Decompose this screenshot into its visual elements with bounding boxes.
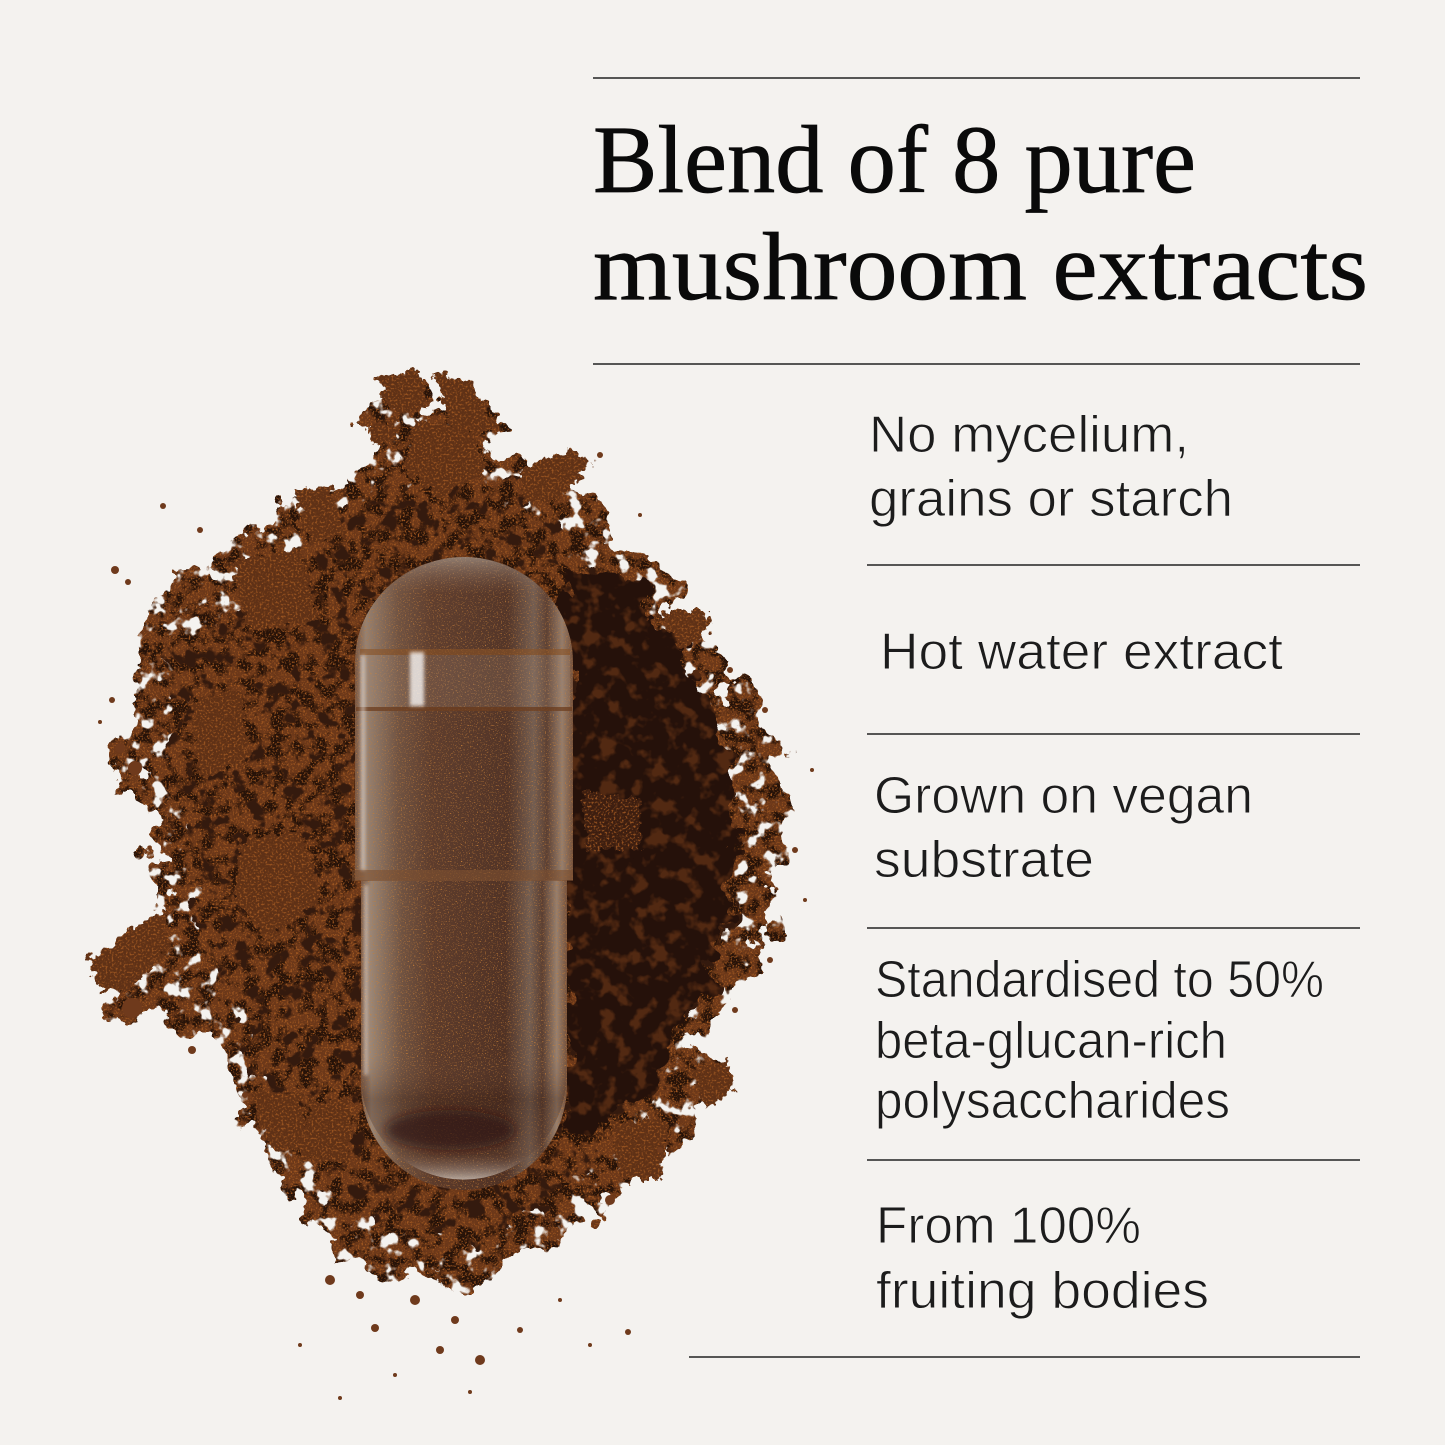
feature: fruiting bodies: fruiting bodies bbox=[876, 1262, 1209, 1320]
feature: fruiting bodies: From 100% bbox=[876, 1197, 1141, 1255]
feature dividers bbox=[593, 364, 1360, 1357]
feature: no mycelium: No mycelium, bbox=[869, 406, 1189, 464]
feature: no mycelium: grains or starch bbox=[869, 470, 1233, 528]
feature: vegan substrate: substrate bbox=[874, 831, 1094, 889]
capsule: dark granules at base bbox=[385, 1110, 515, 1150]
capsule: lower shell bbox=[361, 860, 567, 1190]
powder: scattered particles bbox=[98, 452, 814, 1400]
powder pile bbox=[88, 370, 814, 1400]
capsule: vertical light and shade bbox=[356, 557, 572, 1180]
capsule: upper shell bbox=[355, 557, 573, 880]
feature: no mycelium bbox=[869, 406, 1233, 528]
powder: dark core underlay bbox=[170, 470, 745, 1250]
feature: hot water extract: Hot water extract bbox=[880, 623, 1284, 681]
feature: standardised: Standardised to 50% bbox=[875, 951, 1324, 1009]
feature: standardised: beta-glucan-rich bbox=[875, 1012, 1227, 1070]
capsule: shell bands bbox=[352, 649, 573, 881]
heading rule top bbox=[593, 77, 1360, 79]
title bbox=[593, 106, 1368, 320]
feature: standardised bbox=[875, 951, 1324, 1130]
title: mushroom extracts bbox=[593, 213, 1368, 320]
feature: standardised: polysaccharides bbox=[875, 1072, 1230, 1130]
capsule bbox=[352, 557, 573, 1190]
powder: main mound bbox=[95, 385, 785, 1285]
feature: fruiting bodies bbox=[876, 1197, 1209, 1320]
powder: dark chunk right of capsule bbox=[580, 790, 640, 850]
powder: dark shaded right side bbox=[560, 570, 740, 1140]
feature: vegan substrate: Grown on vegan bbox=[874, 767, 1253, 825]
powder: chunks bbox=[88, 370, 735, 1180]
title: Blend of 8 pure bbox=[593, 106, 1196, 213]
capsule: highlights bbox=[361, 652, 424, 1075]
feature: vegan substrate bbox=[874, 767, 1253, 889]
